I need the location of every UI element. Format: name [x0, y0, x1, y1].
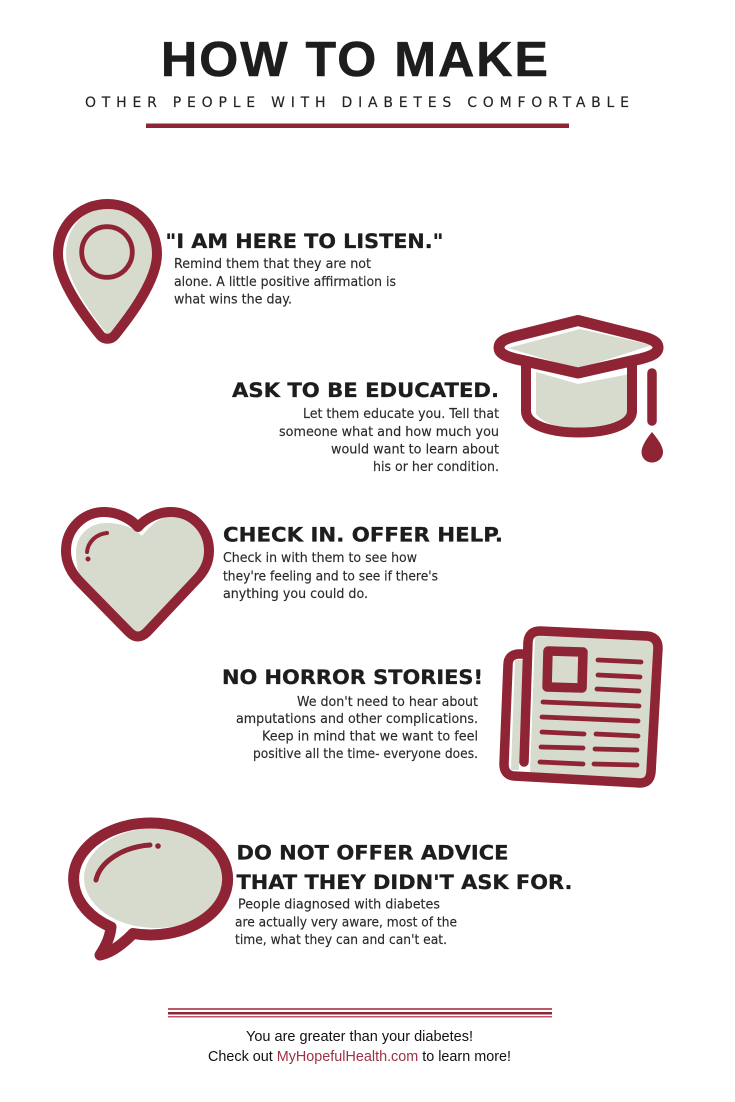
- body text: his or her condition.: [373, 460, 499, 475]
- icon: heart: [66, 512, 209, 636]
- footer text: Check out MyHopefulHealth.com to learn more!: [208, 1049, 511, 1065]
- heading: CHECK IN. OFFER HELP.: [223, 524, 503, 546]
- heading: THAT THEY DIDN'T ASK FOR.: [236, 871, 572, 894]
- panel: check in, offer help: [66, 512, 503, 636]
- body text: [235, 898, 457, 948]
- footer: [168, 1008, 552, 1065]
- body text: amputations and other complications.: [236, 712, 478, 727]
- heading: NO HORROR STORIES!: [222, 666, 483, 689]
- body text: Check in with them to see how: [223, 551, 417, 566]
- panel: ask to be educated: [232, 320, 663, 475]
- subtitle: OTHER PEOPLE WITH DIABETES COMFORTABLE: [85, 95, 629, 111]
- body text: Remind them that they are not: [174, 257, 371, 272]
- body text: someone what and how much you: [279, 425, 499, 440]
- body text: time, what they can and can't eat.: [235, 933, 447, 948]
- body text: would want to learn about: [331, 442, 499, 458]
- panel: no horror stories: [222, 631, 658, 783]
- body text: positive all the time- everyone does.: [253, 747, 478, 762]
- body text: People diagnosed with diabetes: [238, 898, 440, 912]
- heading: "I AM HERE TO LISTEN.": [166, 230, 444, 253]
- title underline: [146, 124, 569, 128]
- panel: do not offer advice: [74, 823, 572, 955]
- body text: what wins the day.: [174, 292, 292, 308]
- panel: I am here to listen: [58, 204, 444, 339]
- body text: We don't need to hear about: [297, 695, 478, 710]
- body text: [223, 551, 438, 602]
- icon: speech bubble: [74, 823, 228, 955]
- body text: Let them educate you. Tell that: [303, 407, 499, 422]
- body text: they're feeling and to see if there's: [223, 570, 438, 584]
- body text: [279, 407, 499, 475]
- header: [85, 33, 629, 128]
- body text: [174, 257, 396, 308]
- title: HOW TO MAKE: [161, 33, 550, 87]
- body text: alone. A little positive affirmation is: [174, 275, 396, 290]
- icon: graduation cap: [499, 320, 663, 462]
- body text: are actually very aware, most of the: [235, 916, 457, 930]
- heading: ASK TO BE EDUCATED.: [232, 379, 499, 402]
- footer text: [208, 1029, 511, 1065]
- footer text: You are greater than your diabetes!: [246, 1029, 473, 1045]
- body text: anything you could do.: [223, 587, 368, 602]
- icon: map pin: [58, 204, 158, 339]
- body text: Keep in mind that we want to feel: [262, 730, 478, 744]
- heading: [236, 842, 572, 894]
- triple rule: [168, 1008, 552, 1018]
- body text: [236, 695, 478, 762]
- icon: newspaper: [504, 631, 658, 783]
- heading: DO NOT OFFER ADVICE: [236, 842, 508, 864]
